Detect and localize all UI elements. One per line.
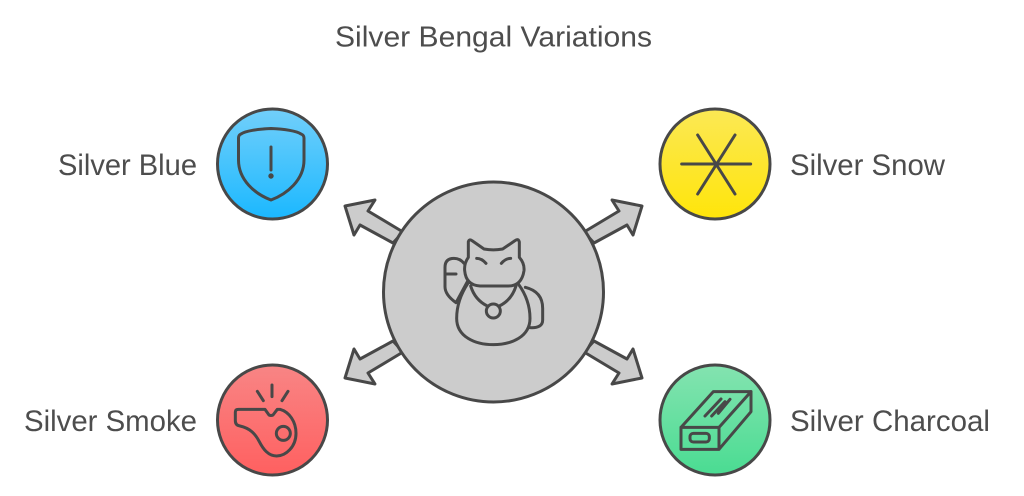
arrow: to Silver Smoke bbox=[345, 341, 403, 384]
icon: whistle bbox=[235, 385, 296, 456]
node: Silver Snow bbox=[660, 109, 770, 219]
title: Silver Bengal Variations bbox=[335, 22, 652, 54]
label: Silver Charcoal: Silver Charcoal bbox=[790, 405, 990, 438]
icon: lucky cat bbox=[445, 240, 543, 345]
node: Silver Smoke bbox=[218, 365, 328, 475]
arrow: to Silver Charcoal bbox=[584, 341, 642, 384]
label: Silver Blue: Silver Blue bbox=[58, 149, 197, 182]
icon: asterisk snowflake bbox=[682, 135, 751, 194]
node: Silver Charcoal bbox=[660, 365, 770, 475]
node: Silver Blue bbox=[218, 109, 328, 219]
central node: Silver Bengal bbox=[384, 182, 604, 402]
arrow: to Silver Blue bbox=[345, 200, 403, 243]
icon: charcoal brick bbox=[681, 392, 751, 449]
icon: shield with exclamation bbox=[238, 128, 304, 200]
label: Silver Snow: Silver Snow bbox=[790, 149, 945, 182]
label: Silver Smoke: Silver Smoke bbox=[24, 405, 197, 438]
arrow: to Silver Snow bbox=[584, 200, 642, 243]
